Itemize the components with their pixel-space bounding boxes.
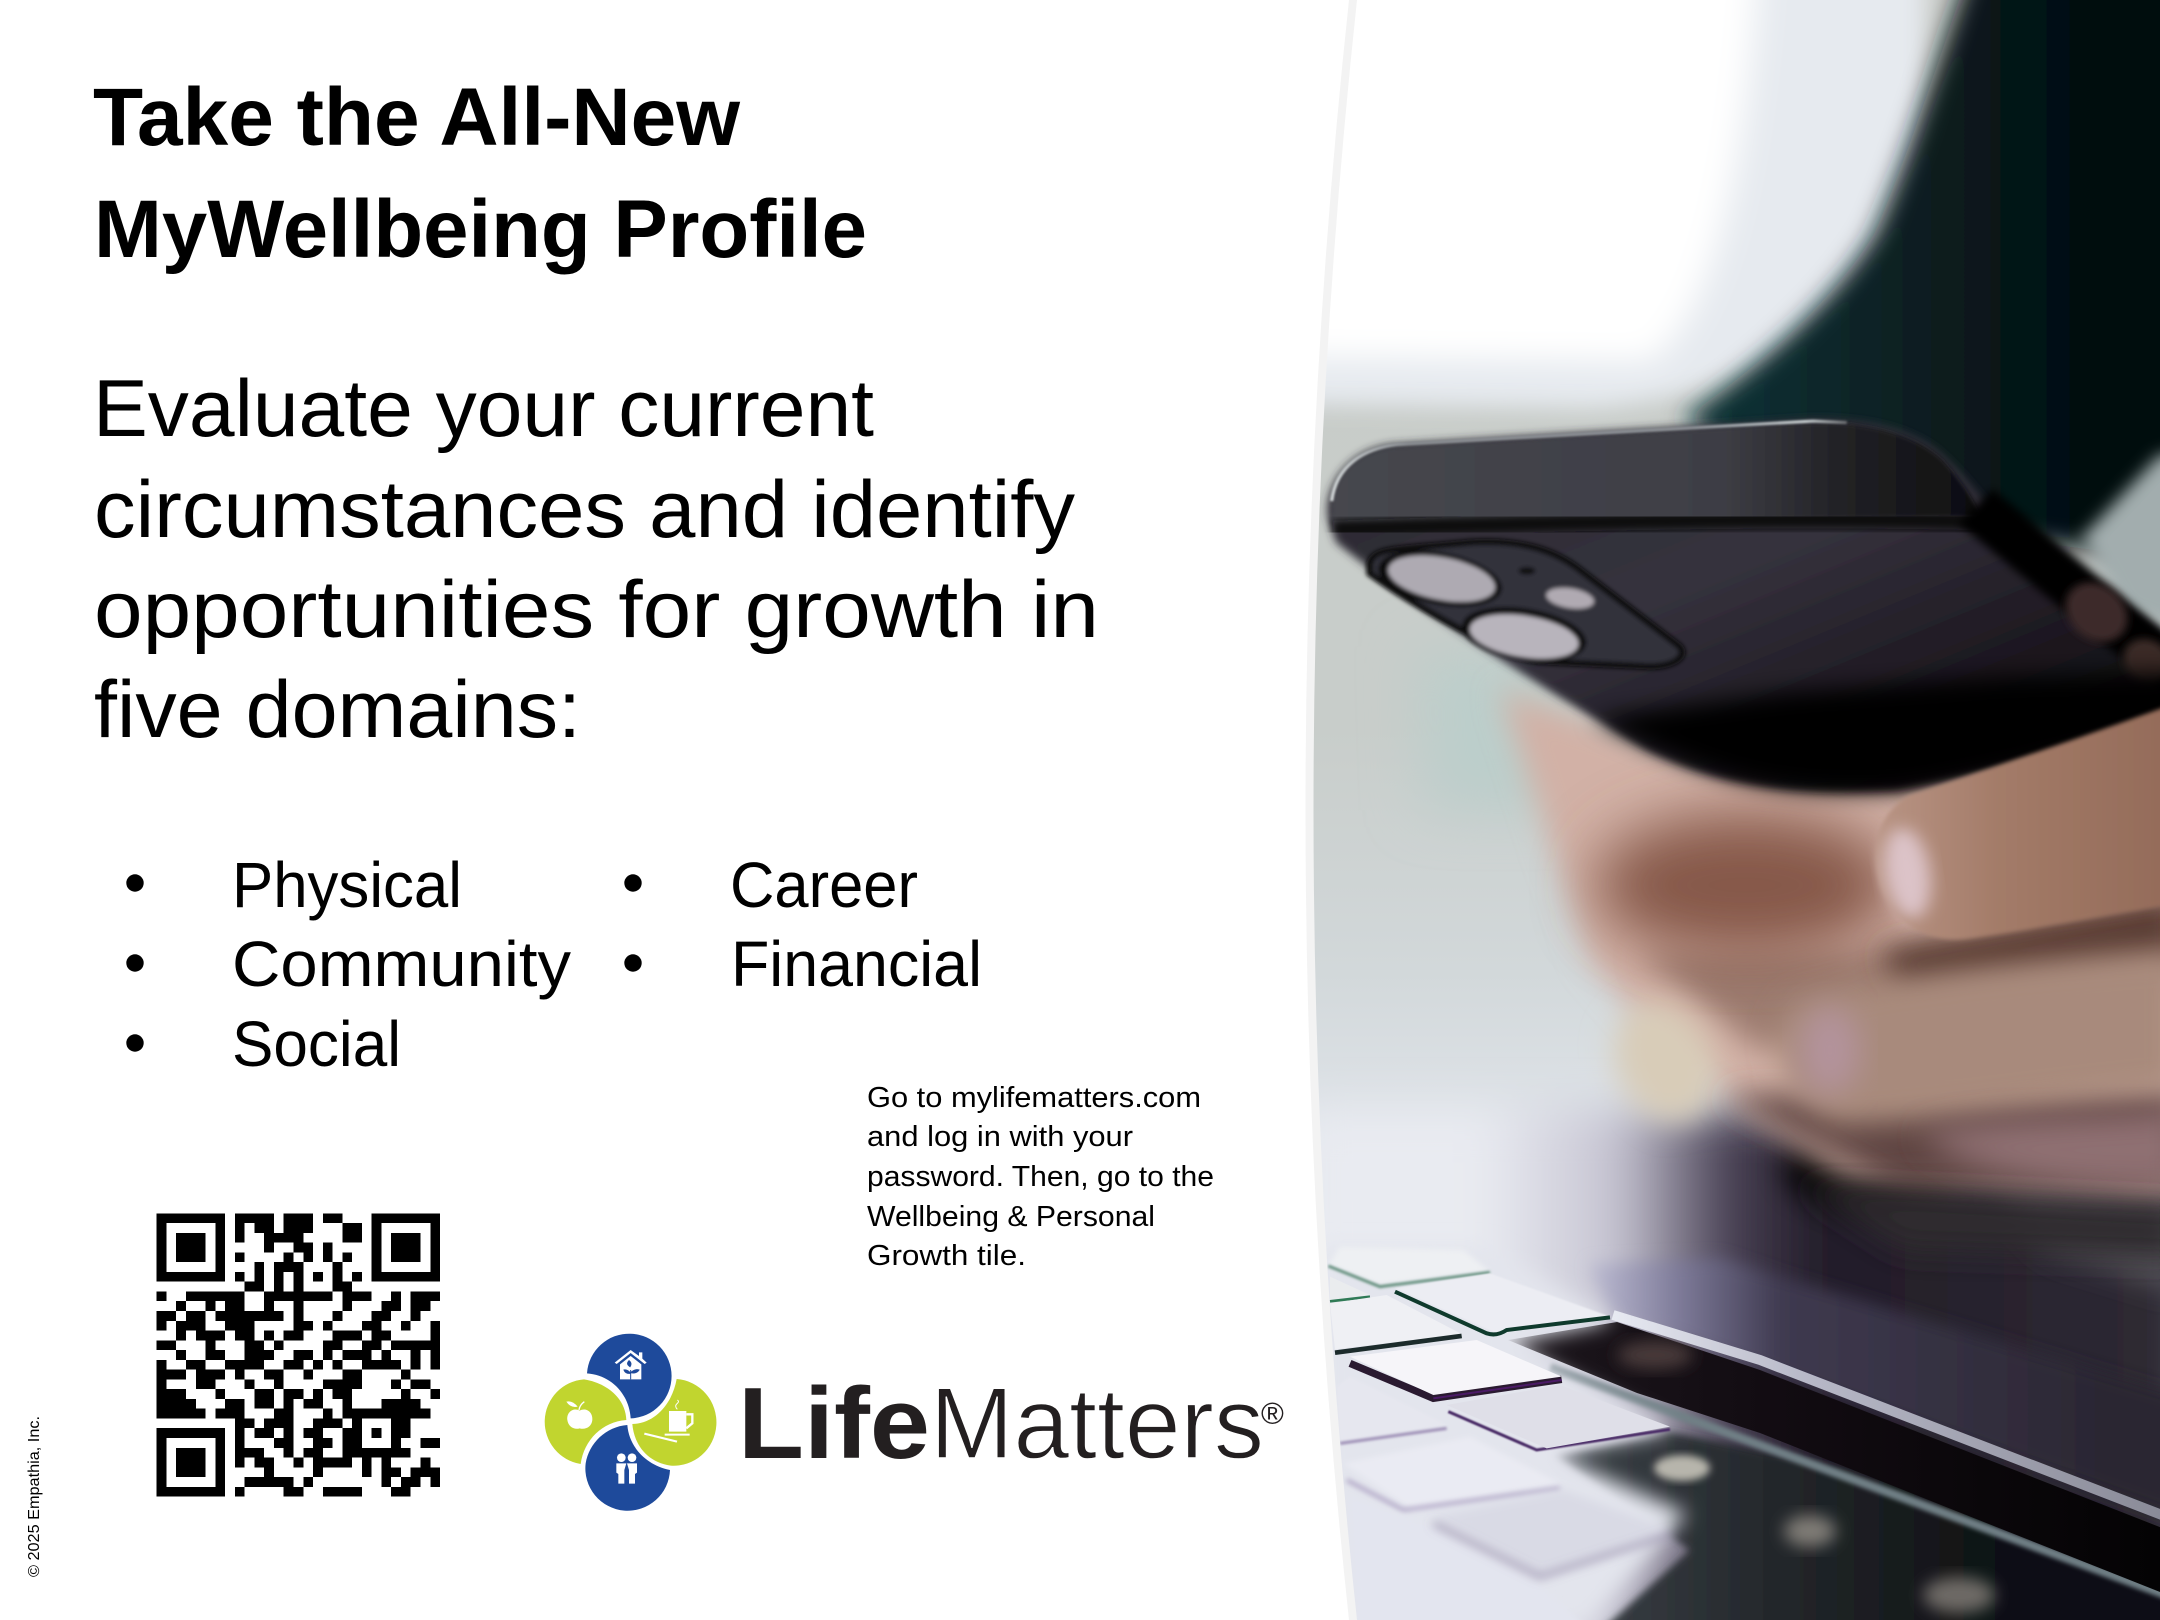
body text: circumstances and identify — [94, 465, 1075, 555]
laptop surface and keyboard deck — [1300, 1110, 2160, 1620]
icon: house with plant — [615, 1350, 647, 1379]
bullet list: five domains: Social — [232, 1008, 401, 1080]
logo wordmark: Matters — [930, 1368, 1264, 1480]
QR code — [157, 1213, 440, 1497]
instructions text: and log in with your — [867, 1121, 1133, 1153]
body text: Evaluate your current — [93, 364, 874, 454]
keyboard keys — [1320, 1247, 1687, 1620]
bullet list: five domains: Career — [730, 849, 918, 921]
bullet list: five domains: Financial — [731, 928, 982, 1000]
instructions text: Go to mylifematters.com — [867, 1082, 1201, 1114]
logo wordmark — [738, 1368, 1284, 1480]
bullet list: five domains: Physical — [232, 849, 462, 921]
icon: two people — [616, 1453, 637, 1484]
title: MyWellbeing Profile — [94, 184, 867, 275]
instructions text: Wellbeing & Personal — [867, 1201, 1155, 1233]
LifeMatters logo — [545, 1334, 1284, 1511]
phone camera module — [1370, 541, 1682, 670]
icon: apple — [566, 1401, 592, 1429]
photo: hand holding a smartphone above a laptop keyboard — [1224, 0, 2160, 1620]
white left panel with curved edge — [0, 0, 1357, 1620]
logo wordmark: Life — [738, 1368, 930, 1480]
instructions text — [867, 1082, 1214, 1272]
bullet list: five domains: Community — [232, 928, 571, 1000]
body text — [93, 364, 1099, 755]
title — [93, 72, 867, 275]
icon: coffee mug and pen — [644, 1400, 692, 1443]
title: Take the All-New — [93, 72, 740, 163]
blurred background window — [1224, 0, 2160, 1620]
logo wordmark: ® — [1261, 1396, 1284, 1431]
copyright: © 2025 Empathia, Inc. — [26, 1416, 43, 1577]
bullet list: five domains — [126, 849, 982, 1080]
instructions text: Growth tile. — [867, 1240, 1026, 1272]
body text: five domains: — [94, 665, 581, 755]
instructions text: password. Then, go to the — [867, 1161, 1214, 1193]
phone body — [1327, 418, 2160, 792]
logo emblem: four swirl petals — [545, 1334, 716, 1511]
body text: opportunities for growth in — [94, 565, 1099, 655]
blurred fingers — [1500, 690, 2160, 1260]
thumb — [1875, 682, 2160, 940]
